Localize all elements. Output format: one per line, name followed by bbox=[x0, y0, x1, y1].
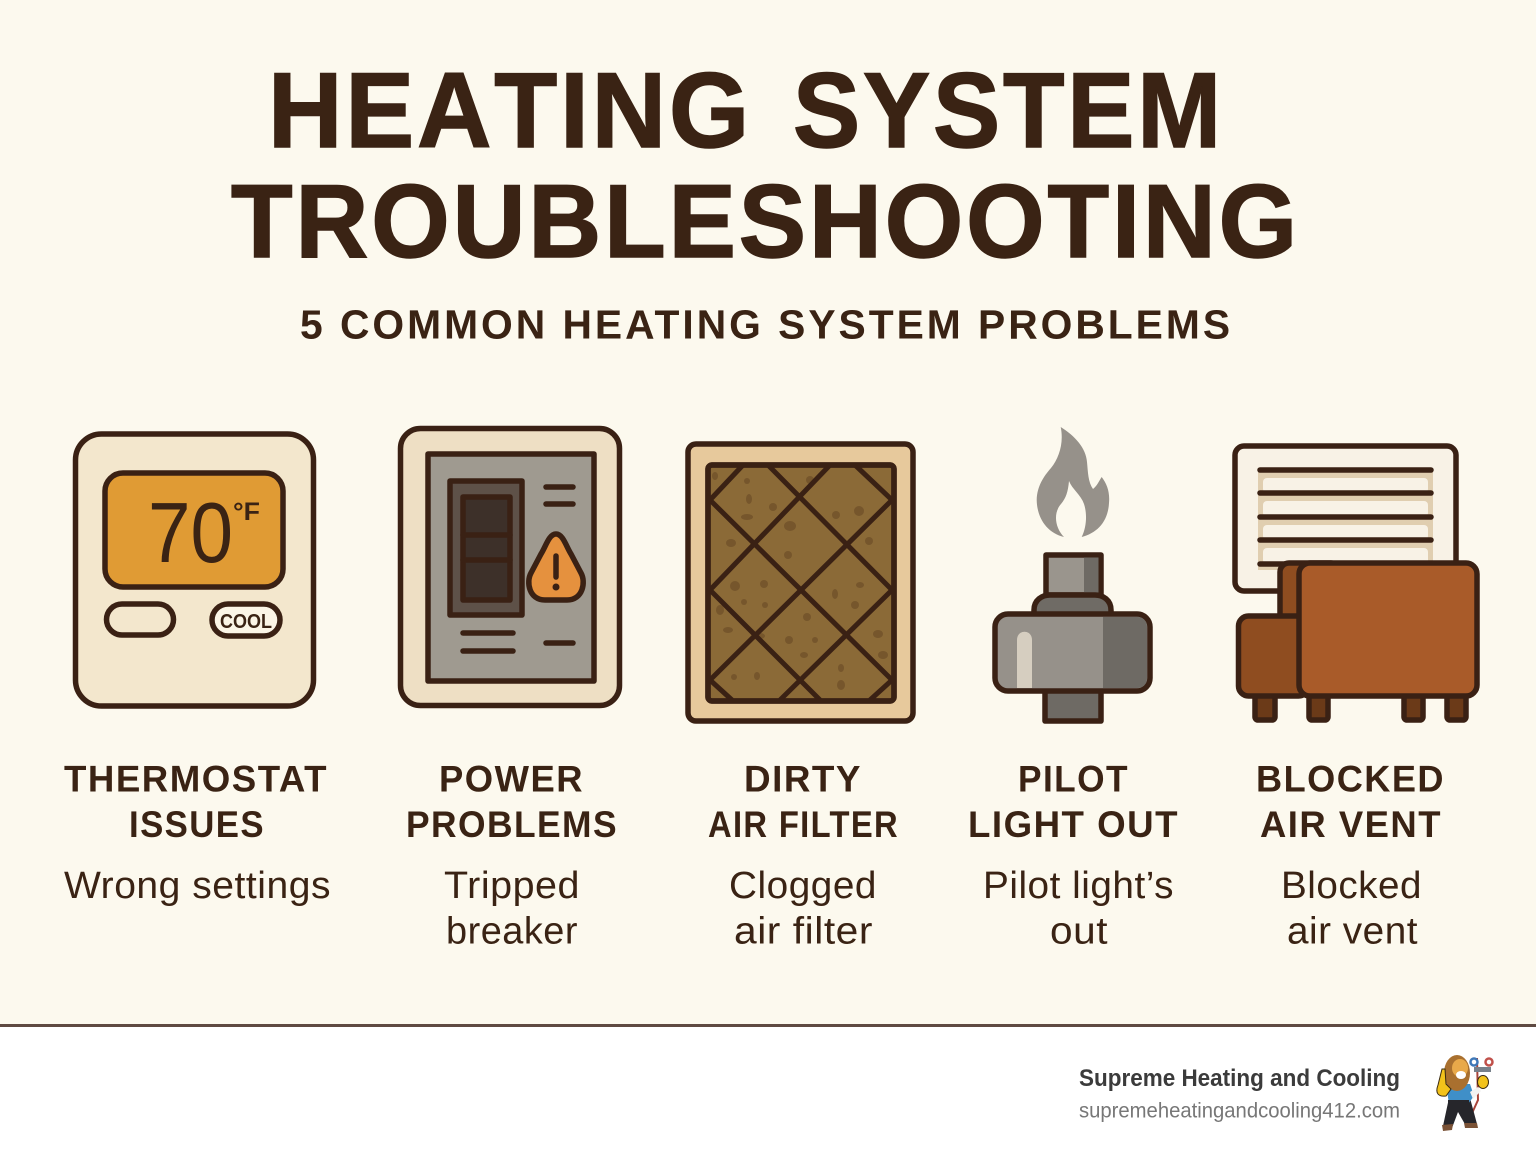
title: HEATING bbox=[268, 50, 752, 170]
heading: blocked air vent: AIR VENT bbox=[1260, 804, 1442, 845]
subtitle: 5 COMMON HEATING SYSTEM PROBLEMS bbox=[300, 302, 1233, 348]
heading: dirty air filter bbox=[708, 758, 899, 845]
description: tripped breaker bbox=[444, 865, 580, 952]
icon: thermostat: 70 bbox=[148, 486, 233, 581]
description: tripped breaker: breaker bbox=[446, 910, 578, 952]
description: blocked air vent: Blocked bbox=[1281, 865, 1422, 907]
icon: thermostat: °F bbox=[233, 498, 260, 526]
heading: blocked air vent bbox=[1256, 758, 1445, 845]
heading: pilot light out: PILOT bbox=[1018, 758, 1129, 800]
description: pilot light's out: out bbox=[1050, 910, 1108, 952]
heading: pilot light out bbox=[968, 758, 1179, 845]
description: clogged air filter: Clogged bbox=[729, 865, 877, 907]
heading: power problems: PROBLEMS bbox=[406, 804, 618, 845]
icon: lion mascot bbox=[1437, 1055, 1492, 1131]
title: SYSTEM bbox=[793, 50, 1224, 170]
heading: blocked air vent: BLOCKED bbox=[1256, 758, 1445, 800]
heading: dirty air filter: AIR FILTER bbox=[708, 804, 899, 845]
title bbox=[231, 50, 1300, 280]
panel: blocked air vent bbox=[1235, 446, 1477, 952]
heading: power problems bbox=[406, 758, 618, 845]
description: tripped breaker: Tripped bbox=[444, 865, 580, 907]
title: TROUBLESHOOTING bbox=[231, 164, 1300, 280]
heading: thermostat issues bbox=[64, 758, 328, 845]
heading: dirty air filter: DIRTY bbox=[744, 758, 862, 800]
icon: thermostat: COOL bbox=[220, 611, 272, 633]
heading: pilot light out: LIGHT OUT bbox=[968, 804, 1179, 845]
heading: thermostat issues: ISSUES bbox=[129, 804, 265, 845]
description: pilot light's out: Pilot light’s bbox=[983, 865, 1174, 907]
description: blocked air vent: air vent bbox=[1287, 910, 1418, 952]
website: supremeheatingandcooling412.com bbox=[1079, 1100, 1400, 1122]
icon: thermostat bbox=[76, 434, 314, 706]
footer branding bbox=[1079, 1055, 1492, 1131]
heading: thermostat issues: THERMOSTAT bbox=[64, 758, 328, 800]
panel: thermostat issues bbox=[64, 434, 331, 907]
company name: Supreme Heating and Cooling bbox=[1079, 1065, 1400, 1092]
description: blocked air vent bbox=[1281, 865, 1422, 952]
icon: grey flame bbox=[1037, 427, 1109, 537]
icon: tripped breaker panel bbox=[400, 428, 620, 706]
panel: power problems bbox=[400, 428, 620, 952]
icon: pilot burner bbox=[995, 555, 1150, 721]
panel: dirty air filter bbox=[688, 444, 913, 952]
icon: air vent bbox=[1235, 446, 1456, 591]
description: wrong settings: Wrong settings bbox=[64, 865, 331, 907]
icon: sofa blocking the vent bbox=[1238, 563, 1477, 720]
description: clogged air filter: air filter bbox=[734, 910, 873, 952]
icon: warning triangle bbox=[529, 534, 583, 600]
heading: power problems: POWER bbox=[439, 758, 584, 800]
description: clogged air filter bbox=[729, 865, 877, 952]
icon: dirty filter bbox=[688, 444, 913, 721]
panel: pilot light out bbox=[968, 427, 1179, 952]
description: pilot light's out bbox=[983, 865, 1174, 952]
